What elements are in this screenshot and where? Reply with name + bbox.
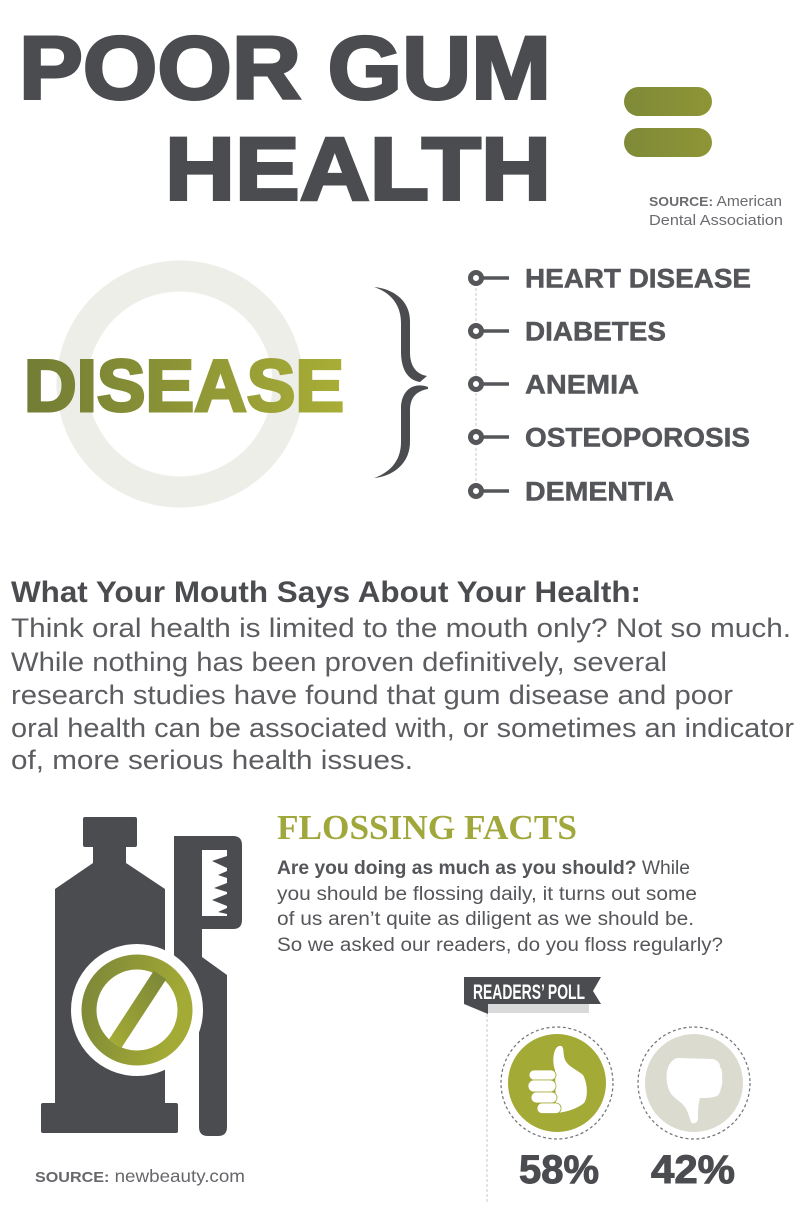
list item: dementia: DEMENTIA xyxy=(525,476,674,506)
connector line xyxy=(475,288,477,482)
flossing paragraph: you should be flossing daily, it turns out some xyxy=(277,884,697,905)
toothbrush xyxy=(174,836,242,1136)
list item: osteoporosis: OSTEOPOROSIS xyxy=(525,422,750,452)
list item: anemia xyxy=(470,370,639,400)
body paragraph: While nothing has been proven definitively, several xyxy=(11,647,667,677)
thumbs up xyxy=(501,1027,613,1139)
source: American Dental Association: Dental Association xyxy=(649,213,783,229)
flossing paragraph xyxy=(277,858,723,956)
list item: heart disease: HEART DISEASE xyxy=(525,264,751,294)
percent 42: 42% xyxy=(651,1148,735,1192)
curly brace xyxy=(374,287,428,478)
body paragraph: research studies have found that gum disease and poor xyxy=(11,680,733,710)
title: HEALTH xyxy=(165,118,551,218)
flossing paragraph: Are you doing as much as you should? While xyxy=(277,858,690,879)
toothbrush bristles xyxy=(202,850,227,916)
body paragraph: of, more serious health issues. xyxy=(11,745,413,775)
heading: what your mouth says: What Your Mouth Says About Your Health: xyxy=(11,576,641,609)
thumbs down xyxy=(638,1027,750,1139)
thumb down hand xyxy=(667,1058,722,1123)
disease word: DISEASE xyxy=(24,346,344,427)
title: POOR GUM xyxy=(19,18,551,118)
source: newbeauty.com: SOURCE: newbeauty.com xyxy=(35,1166,245,1186)
equals sign icon xyxy=(624,87,712,157)
body paragraph: oral health can be associated with, or sometimes an indicator xyxy=(11,713,794,743)
disease ring xyxy=(72,276,288,492)
flossing paragraph: So we asked our readers, do you floss regularly? xyxy=(277,935,723,956)
body paragraph: Think oral health is limited to the mouth only? Not so much. xyxy=(11,613,791,643)
list item: anemia: ANEMIA xyxy=(525,370,639,400)
list item: diabetes: DIABETES xyxy=(525,316,666,346)
toothpaste tube xyxy=(41,817,178,1133)
heading: flossing facts: FLOSSING FACTS xyxy=(277,808,577,847)
source: American Dental Association: SOURCE: American xyxy=(649,194,782,210)
source: American Dental Association xyxy=(649,194,783,229)
percent 58: 58% xyxy=(519,1148,599,1192)
icon: toothpaste tube and toothbrush xyxy=(41,817,242,1136)
list item: dementia xyxy=(470,476,674,506)
list item: diabetes xyxy=(470,316,666,346)
disease list xyxy=(470,264,751,506)
thumb hand xyxy=(528,1046,587,1114)
body paragraph xyxy=(11,613,794,775)
readers' poll banner xyxy=(464,977,601,1014)
readers' poll banner: READERS’ POLL xyxy=(473,981,585,1004)
title xyxy=(19,18,551,218)
poll divider xyxy=(486,1014,488,1202)
flossing paragraph: of us aren’t quite as diligent as we should be. xyxy=(277,909,694,930)
prohibition symbol xyxy=(71,944,203,1076)
